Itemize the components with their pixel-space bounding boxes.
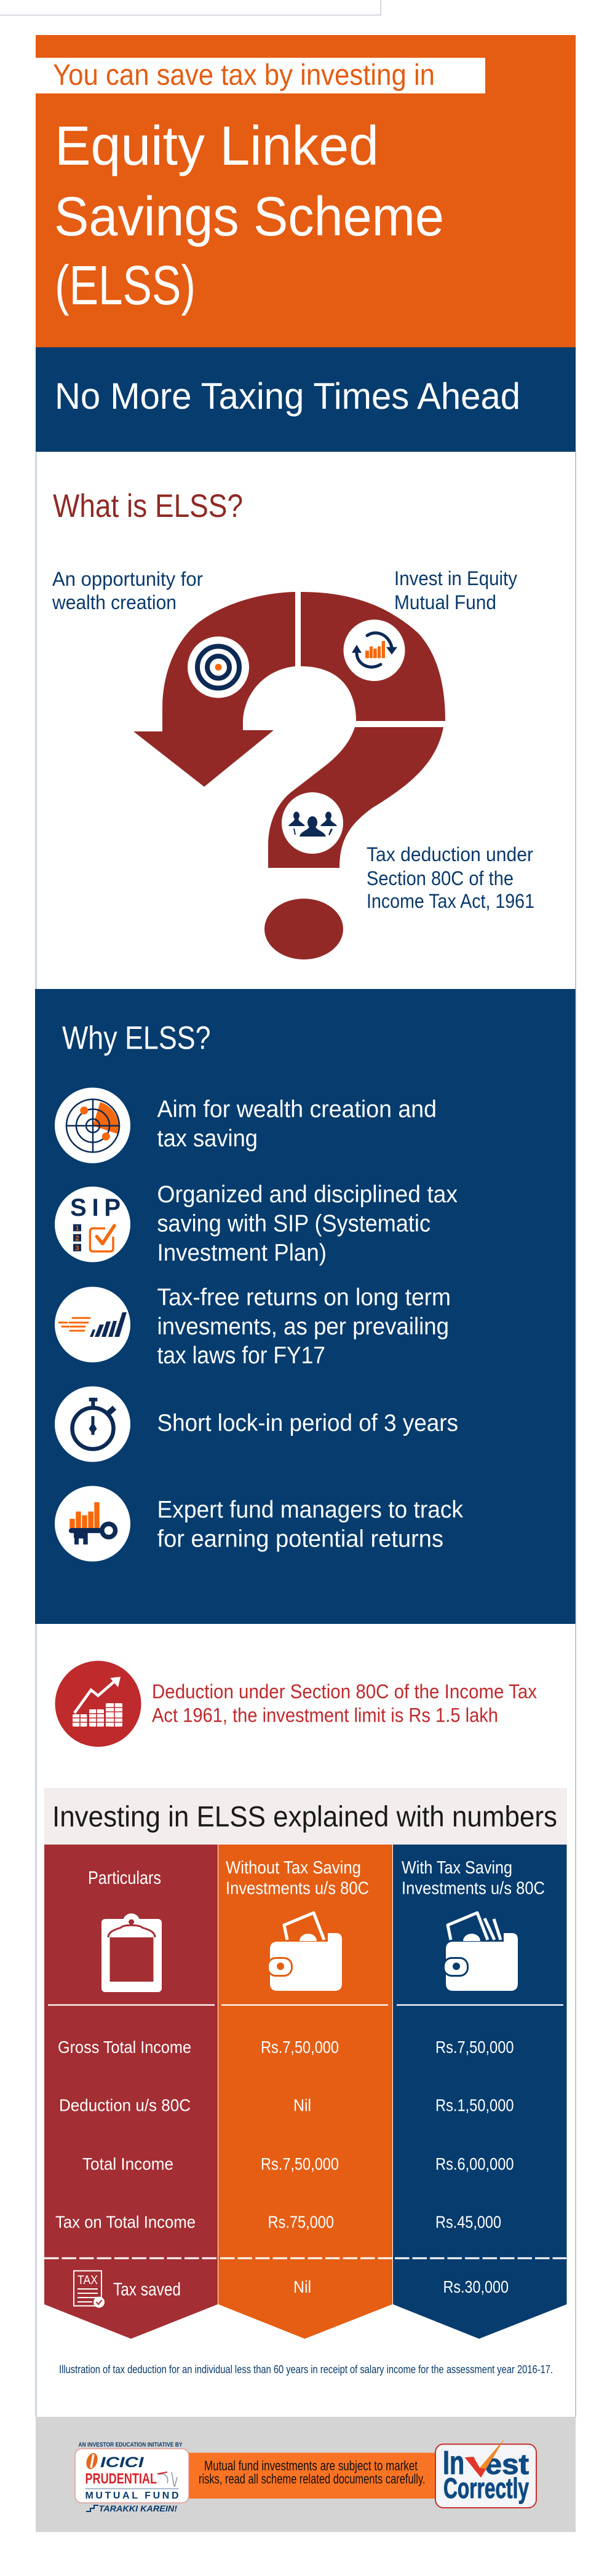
text: deduction limit bbox=[152, 1680, 537, 1726]
logo: ICICI Prudential bbox=[75, 2449, 189, 2503]
column values: Rs.30,000 bbox=[443, 2277, 509, 2296]
text: deduction limit: Act 1961, the investment limit is Rs 1.5 lakh bbox=[152, 1704, 498, 1726]
text: wealth creation: An opportunity for bbox=[52, 568, 203, 590]
column values: Nil bbox=[293, 2277, 311, 2296]
logo: ICICI Prudential: MUTUAL FUND bbox=[85, 2491, 178, 2501]
logo: invest correctly: est bbox=[485, 2448, 529, 2480]
column values: Rs.7,50,000 bbox=[261, 2038, 339, 2057]
panel: footer bbox=[36, 2417, 576, 2532]
column values bbox=[435, 2038, 514, 2296]
column values: Nil bbox=[293, 2096, 311, 2114]
text: initiative line: AN INVESTOR EDUCATION INITIATIVE BY bbox=[79, 2441, 182, 2449]
icon: people bbox=[282, 792, 343, 854]
heading: what is ELSS: What is ELSS? bbox=[53, 488, 243, 524]
text: tax free bbox=[157, 1285, 451, 1369]
kicker line: You can save tax by investing in bbox=[53, 59, 435, 92]
icon: radar bbox=[55, 1088, 130, 1163]
disclaimer band bbox=[188, 2452, 436, 2499]
logo: invest correctly: Correctly bbox=[443, 2472, 529, 2504]
row labels: Tax on Total Income bbox=[55, 2213, 196, 2231]
text: tax deduction bbox=[367, 843, 534, 912]
text: tax free: Tax-free returns on long term bbox=[157, 1285, 451, 1310]
panel: subtitle band bbox=[36, 347, 576, 452]
text: aim bbox=[157, 1097, 437, 1152]
text: SIP bbox=[157, 1181, 458, 1266]
panel: subtitle band: No More Taxing Times Ahead bbox=[55, 376, 520, 417]
icon: SIP checklist: SIP bbox=[70, 1194, 121, 1221]
text: wealth creation bbox=[52, 568, 203, 613]
table: particulars column bbox=[44, 1845, 218, 2339]
chart: question mark arrow bbox=[133, 592, 445, 959]
text: SIP: saving with SIP (Systematic bbox=[157, 1211, 430, 1237]
icon: stopwatch bbox=[55, 1387, 130, 1462]
row labels bbox=[55, 2038, 196, 2231]
heading: investing in ELSS: Investing in ELSS explained with numbers bbox=[52, 1800, 557, 1833]
heading: why ELSS: Why ELSS? bbox=[62, 1020, 210, 1056]
text: tax deduction: Income Tax Act, 1961 bbox=[367, 890, 534, 912]
icon: tax-free returns bbox=[55, 1287, 130, 1362]
column header bbox=[402, 1858, 545, 1898]
text: invest in equity: Invest in Equity bbox=[394, 567, 517, 589]
logo: ICICI Prudential: ICICI bbox=[100, 2454, 145, 2471]
text: SIP: Organized and disciplined tax bbox=[157, 1181, 458, 1208]
main title: (ELSS) bbox=[55, 255, 196, 317]
column header: With Tax Saving bbox=[402, 1858, 512, 1878]
main title: Savings Scheme bbox=[54, 186, 444, 248]
icon: tax document: TAX bbox=[77, 2274, 98, 2287]
panel: why ELSS bbox=[35, 989, 576, 1624]
table: without tax saving column bbox=[218, 1845, 392, 2339]
column values: Rs.75,000 bbox=[268, 2213, 334, 2231]
text: tax deduction: Section 80C of the bbox=[367, 867, 514, 889]
row labels: Total Income bbox=[82, 2154, 173, 2173]
main title bbox=[54, 116, 444, 317]
panel: title header bbox=[36, 35, 576, 347]
column values: Rs.7,50,000 bbox=[261, 2154, 339, 2173]
text: wealth creation: wealth creation bbox=[52, 591, 177, 613]
icon: wallet with one note bbox=[268, 1913, 342, 1991]
text: invest in equity: Mutual Fund bbox=[394, 591, 496, 613]
row labels: Deduction u/s 80C bbox=[59, 2096, 191, 2114]
disclaimer band: risks, read all scheme related documents carefully. bbox=[199, 2471, 426, 2487]
logo: invest correctly: In bbox=[443, 2444, 464, 2481]
table: with tax saving column bbox=[393, 1845, 567, 2339]
disclaimer band: Mutual fund investments are subject to market bbox=[204, 2458, 418, 2473]
icon: cycle with bars bbox=[343, 620, 405, 681]
label: tax saved: Tax saved bbox=[113, 2279, 181, 2300]
text: fund managers: for earning potential returns bbox=[157, 1526, 443, 1553]
text: aim: tax saving bbox=[157, 1125, 258, 1152]
text: SIP: Investment Plan) bbox=[157, 1240, 327, 1266]
icon: SIP checklist: 3 bbox=[75, 1245, 79, 1252]
text: deduction limit: Deduction under Section 80C of the Income Tax bbox=[152, 1680, 537, 1703]
icon: wallet with many notes bbox=[444, 1913, 518, 1991]
icon: SIP checklist: 2 bbox=[75, 1235, 79, 1242]
text: fund managers: Expert fund managers to track bbox=[157, 1497, 463, 1523]
panel: what is ELSS bbox=[52, 488, 534, 959]
column header: Without Tax Saving bbox=[226, 1858, 361, 1878]
text: lock-in: Short lock-in period of 3 years bbox=[157, 1410, 458, 1436]
icon: SIP checklist bbox=[55, 1186, 130, 1262]
column header: Investments u/s 80C bbox=[226, 1878, 369, 1898]
row labels: Gross Total Income bbox=[58, 2038, 191, 2057]
column header: Investments u/s 80C bbox=[402, 1878, 545, 1898]
text: aim: Aim for wealth creation and bbox=[157, 1097, 437, 1122]
icon: SIP checklist: 1 bbox=[75, 1224, 79, 1232]
text: tax deduction: Tax deduction under bbox=[367, 843, 533, 865]
icon: tax document bbox=[74, 2271, 105, 2307]
column values: Rs.7,50,000 bbox=[435, 2038, 514, 2057]
column values: Rs.6,00,000 bbox=[435, 2154, 514, 2173]
icon: key with bars bbox=[55, 1486, 130, 1561]
column values bbox=[261, 2038, 339, 2296]
column header: Particulars bbox=[88, 1868, 161, 1888]
column values: Rs.1,50,000 bbox=[435, 2096, 514, 2114]
column header bbox=[226, 1858, 369, 1898]
icon: growth coins bbox=[55, 1661, 141, 1747]
logo: ICICI Prudential: PRUDENTIAL bbox=[85, 2471, 157, 2487]
main title: Equity Linked bbox=[55, 116, 379, 177]
column values: Rs.45,000 bbox=[435, 2213, 501, 2231]
text: tax free: tax laws for FY17 bbox=[157, 1342, 325, 1369]
text: tax free: invesments, as per prevailing bbox=[157, 1314, 449, 1340]
callout: section 80C limit bbox=[55, 1661, 537, 1747]
text: fund managers bbox=[157, 1497, 463, 1553]
icon: clipboard bbox=[101, 1913, 162, 1992]
text: invest in equity bbox=[394, 567, 517, 613]
icon: target bbox=[188, 637, 249, 698]
logo: invest correctly bbox=[435, 2439, 536, 2508]
heading: investing in ELSS bbox=[44, 1788, 567, 1845]
text: tarakki karein: TARAKKI KAREIN! bbox=[98, 2503, 177, 2513]
